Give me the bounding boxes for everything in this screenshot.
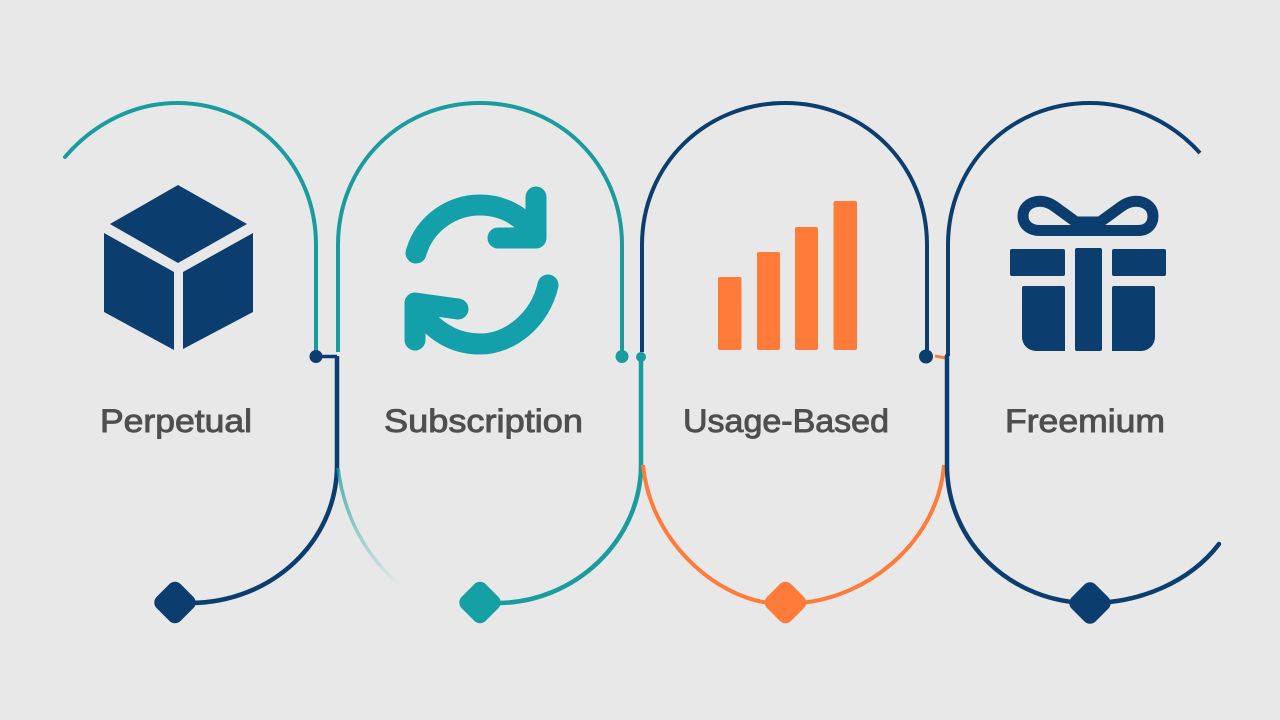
connector line: top arc, teal (65, 103, 316, 352)
connector line: top arc, navy (948, 103, 1200, 356)
panel: Perpetual (65, 103, 337, 627)
label: Perpetual: Perpetual (100, 403, 252, 439)
connector node: teal dot (616, 350, 628, 363)
connector line: top arc, navy (642, 103, 927, 352)
panel: Freemium (947, 103, 1219, 627)
node: navy diamond (151, 578, 199, 627)
connector line: bottom arc, navy (190, 356, 337, 603)
node: navy diamond (1066, 579, 1114, 627)
label: Freemium: Freemium (1005, 403, 1165, 439)
connector line: bottom arc, orange (643, 465, 944, 603)
node: orange diamond (761, 578, 810, 627)
icon: refresh arrows (415, 197, 548, 344)
connector node: navy dot (919, 350, 933, 364)
connector line: bottom arc, teal (497, 356, 641, 603)
label: Subscription: Subscription (384, 403, 583, 439)
panel: Subscription (338, 103, 641, 627)
icon: bar chart (718, 201, 857, 350)
connector line: bottom arc, navy (947, 356, 1219, 603)
label: Usage-Based: Usage-Based (683, 403, 889, 439)
icon: gift box (1010, 201, 1166, 351)
panel: Usage-Based (636, 103, 946, 627)
faint fading curve (338, 468, 400, 586)
connector stub: orange (935, 356, 946, 358)
connector node: teal dot (636, 352, 646, 362)
connector line: top arc, teal (338, 103, 622, 352)
connector node: navy dot (310, 350, 322, 363)
node: teal diamond (456, 578, 504, 627)
connector stub (316, 355, 337, 358)
icon: cube (104, 185, 253, 350)
